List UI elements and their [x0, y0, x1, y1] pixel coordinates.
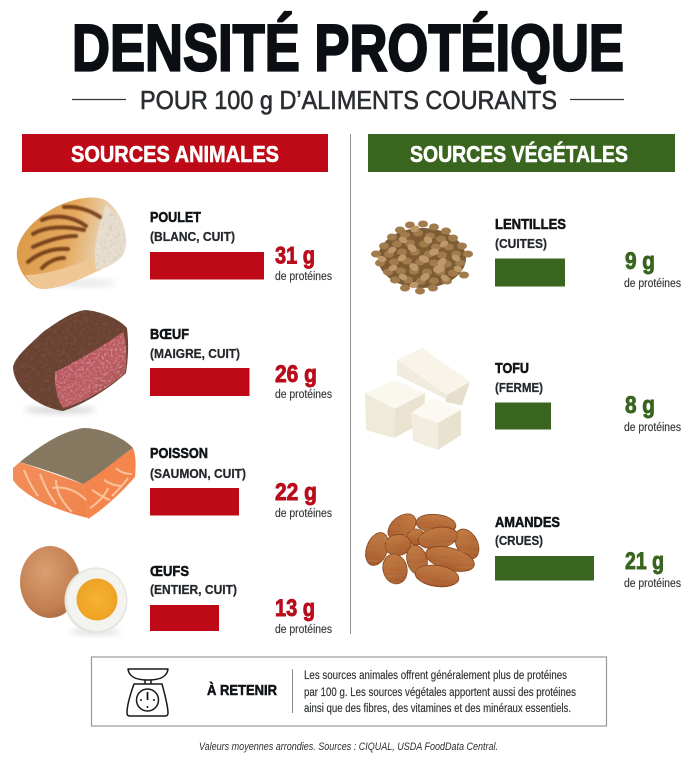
label: boeuf: (MAIGRE, CUIT) [150, 346, 240, 361]
text: à retenir: ainsi que des fibres, des vitamines et des minéraux essentiels. [304, 703, 571, 715]
footnote: Valeurs moyennes arrondies. Sources : CIQUAL, USDA FoodData Central. [199, 741, 498, 753]
bar: oeufs [150, 605, 219, 631]
value: lentilles: 9 g [625, 248, 655, 275]
panel: sources végétales [361, 134, 681, 590]
label: tofu: TOFU [495, 360, 529, 377]
value: oeufs [275, 595, 332, 636]
bar: amandes [495, 556, 594, 580]
value: poulet: 31 g [275, 242, 315, 270]
heading: sources végétales [368, 134, 675, 172]
value: tofu: de protéines [624, 422, 681, 434]
icon: amandes [361, 509, 484, 589]
label: oeufs: (ENTIER, CUIT) [150, 582, 237, 597]
heading: sources animales: SOURCES ANIMALES [71, 141, 279, 167]
label: poisson: (SAUMON, CUIT) [150, 466, 246, 481]
bar: lentilles [495, 258, 565, 286]
icon: lentilles [371, 220, 473, 294]
label: poisson [150, 445, 246, 481]
label: lentilles: LENTILLES [495, 216, 566, 233]
value: tofu [624, 392, 681, 434]
label: poisson: POISSON [150, 445, 208, 462]
label: oeufs: ŒUFS [150, 563, 189, 580]
value: amandes: 21 g [625, 548, 664, 575]
bar: poisson [150, 488, 239, 516]
label: amandes [495, 514, 560, 548]
bar: poulet [150, 252, 264, 280]
icon: tofu [365, 348, 470, 450]
label: amandes: (CRUES) [495, 533, 543, 548]
value: lentilles [624, 248, 681, 290]
icon: poulet [17, 198, 126, 289]
value: poisson: de protéines [275, 508, 332, 520]
value: poisson: 22 g [275, 479, 317, 506]
value: amandes [624, 548, 681, 590]
label: à retenir: À RETENIR [207, 682, 277, 699]
bar: tofu [495, 402, 551, 430]
panel: sources animales [13, 134, 332, 636]
icon: poisson [13, 428, 136, 519]
bar: boeuf [150, 368, 250, 396]
label: lentilles [495, 216, 566, 251]
heading: sources animales [22, 134, 328, 172]
value: poisson [275, 479, 332, 520]
label: boeuf [150, 326, 240, 361]
icon: balance [127, 669, 168, 716]
text: à retenir: Les sources animales offrent généralement plus de protéines [304, 670, 567, 682]
text: à retenir [304, 670, 576, 715]
value: amandes: de protéines [624, 578, 681, 590]
label: amandes: AMANDES [495, 514, 560, 531]
value: oeufs: de protéines [275, 624, 332, 636]
value: boeuf: 26 g [275, 361, 317, 388]
label: poulet: POULET [150, 209, 201, 226]
label: lentilles: (CUITES) [495, 236, 547, 251]
label: poulet [150, 209, 235, 244]
callout: à retenir [92, 657, 606, 726]
value: lentilles: de protéines [624, 278, 681, 290]
text: à retenir: par 100 g. Les sources végétales apportent aussi des protéines [304, 687, 576, 699]
value: boeuf [275, 361, 332, 401]
icon: boeuf [13, 310, 128, 414]
value: poulet: de protéines [275, 271, 332, 283]
label: oeufs [150, 563, 237, 597]
value: boeuf: de protéines [275, 389, 332, 401]
label: tofu: (FERME) [495, 380, 543, 395]
label: poulet: (BLANC, CUIT) [150, 229, 235, 244]
subtitle: POUR 100 g D’ALIMENTS COURANTS [140, 85, 557, 115]
value: tofu: 8 g [625, 392, 655, 419]
value: oeufs: 13 g [275, 595, 315, 622]
label: tofu [495, 360, 543, 395]
value: poulet [275, 242, 332, 283]
label: boeuf: BŒUF [150, 326, 189, 343]
heading: sources végétales: SOURCES VÉGÉTALES [410, 140, 628, 167]
icon: oeufs [20, 546, 128, 635]
